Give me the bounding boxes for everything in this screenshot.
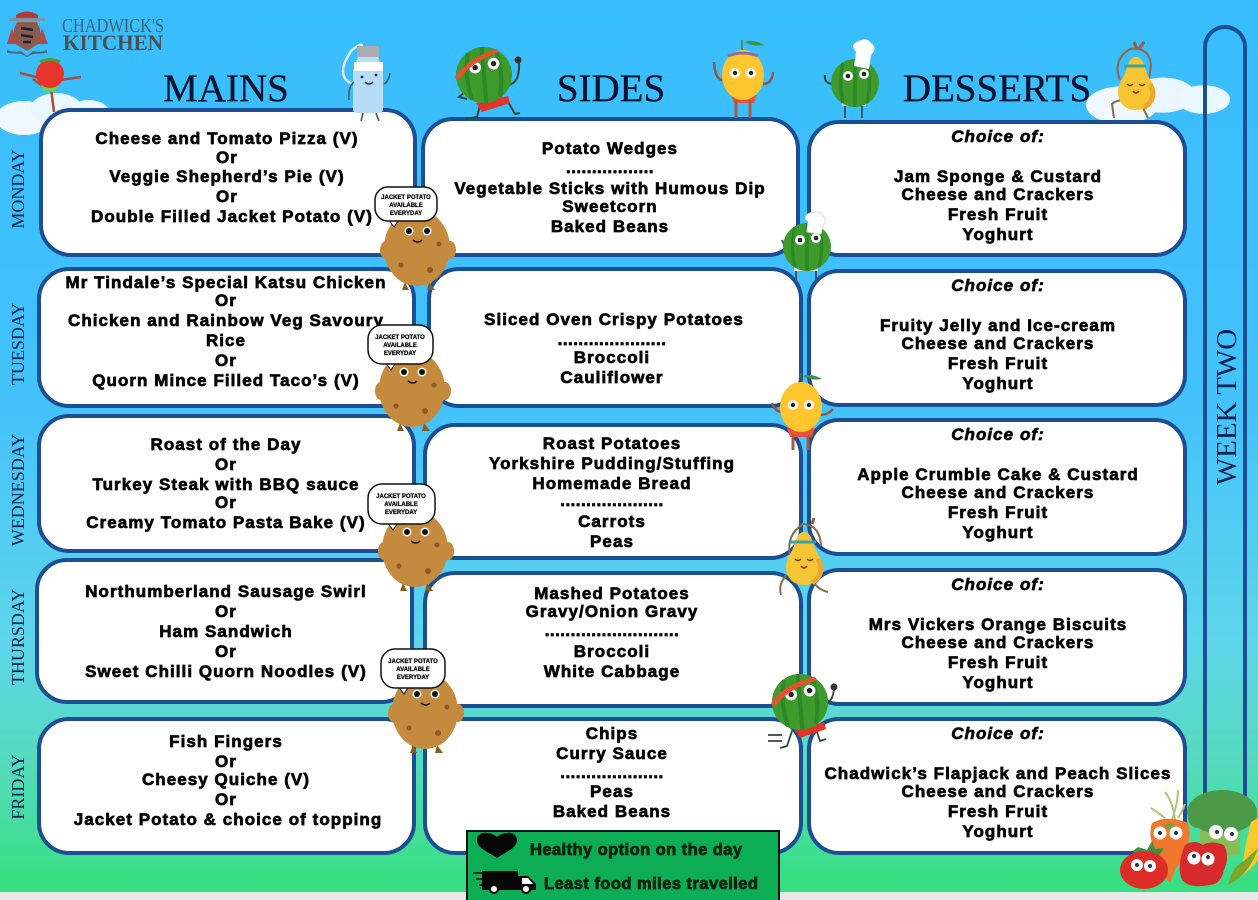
panel: mains friday: Or [215, 752, 237, 771]
week two panel [1205, 27, 1245, 810]
callout: jacket potato thursday: AVAILABLE [396, 667, 430, 673]
panel: desserts friday: Yoghurt [962, 822, 1034, 841]
callout: jacket potato wednesday [368, 484, 454, 591]
panel: desserts thursday: Choice of: [951, 575, 1045, 594]
panel: mains monday: Cheese and Tomato Pizza (V) [95, 129, 359, 148]
panel: mains tuesday: Or [215, 291, 237, 310]
panel: mains monday: Double Filled Jacket Potato (V) [91, 207, 373, 226]
panel: mains thursday: Or [215, 642, 237, 661]
panel: mains monday: Or [216, 148, 238, 167]
panel: sides thursday: White Cabbage [544, 662, 680, 681]
panel: desserts friday: Choice of: [951, 724, 1045, 743]
panel: desserts monday: Choice of: [951, 127, 1045, 146]
cloud left [0, 93, 110, 135]
icon: water bottle character [343, 45, 390, 121]
panel: desserts thursday: Mrs Vickers Orange Biscuits [869, 615, 1127, 634]
callout: jacket potato tuesday: EVERYDAY [384, 351, 416, 357]
panel: mains wednesday [39, 416, 414, 551]
week two label: WEEK TWO [1211, 329, 1243, 485]
day label friday: FRIDAY [8, 754, 28, 820]
panel: sides wednesday: Carrots [578, 512, 646, 531]
icon: heart [477, 833, 517, 858]
callout: jacket potato monday: EVERYDAY [390, 211, 422, 217]
callout: jacket potato monday: JACKET POTATO [381, 195, 431, 201]
icon: pear character top [1112, 42, 1154, 118]
panel: desserts tuesday: Yoghurt [962, 374, 1034, 393]
legend text healthy: Healthy option on the day [530, 841, 743, 859]
panel: mains tuesday: Mr Tindale’s Special Katsu Chicken [65, 273, 387, 292]
callout: jacket potato thursday [381, 649, 464, 753]
panel: desserts tuesday: Choice of: [951, 276, 1045, 295]
heading mains: MAINS [163, 67, 289, 110]
panel: desserts thursday: Yoghurt [962, 673, 1034, 692]
panel: mains tuesday [39, 269, 414, 406]
callout: jacket potato wednesday: JACKET POTATO [376, 494, 426, 500]
logo wordmark [62, 15, 164, 55]
panel: mains wednesday: Or [215, 455, 237, 474]
day label tuesday: TUESDAY [8, 303, 28, 385]
panel: mains tuesday: Chicken and Rainbow Veg Savoury [68, 311, 384, 330]
panel: sides monday: Vegetable Sticks with Humous Dip [454, 179, 766, 198]
panel: sides tuesday: Sliced Oven Crispy Potatoes [484, 310, 744, 329]
panel: sides friday: Curry Sauce [556, 744, 668, 763]
day label monday: MONDAY [8, 149, 28, 229]
callout: jacket potato tuesday [368, 325, 451, 431]
icon: chef watermelon on panel [782, 212, 831, 282]
panel: sides tuesday: Broccoli [574, 348, 650, 367]
icon: running watermelon bottom [768, 672, 838, 748]
panel: sides monday [423, 119, 798, 255]
panel: desserts thursday: Fresh Fruit [948, 653, 1048, 672]
panel: mains tuesday: Or [215, 351, 237, 370]
panel: desserts wednesday: Cheese and Crackers [902, 483, 1094, 502]
panel: desserts wednesday: Apple Crumble Cake & Custard [857, 465, 1139, 484]
panel: desserts tuesday: Fruity Jelly and Ice-cream [880, 316, 1116, 335]
panel: mains wednesday: Roast of the Day [151, 435, 301, 454]
icon: pear character middle [780, 518, 828, 595]
panel: sides friday: Chips [586, 724, 638, 743]
legend [467, 831, 779, 900]
panel: sides thursday: .......................... [545, 621, 679, 640]
panel: mains monday: Veggie Shepherd’s Pie (V) [109, 167, 345, 186]
panel: desserts monday: Fresh Fruit [948, 205, 1048, 224]
panel: sides thursday: Mashed Potatoes [534, 584, 690, 603]
panel: mains friday: Fish Fingers [169, 732, 283, 751]
panel: desserts friday [809, 719, 1185, 853]
callout: jacket potato thursday: EVERYDAY [397, 675, 429, 681]
panel: sides wednesday: Homemade Bread [532, 474, 692, 493]
panel: desserts monday: Cheese and Crackers [902, 185, 1094, 204]
panel: desserts wednesday: Yoghurt [962, 523, 1034, 542]
panel: desserts monday: Yoghurt [962, 225, 1034, 244]
icon: chef watermelon top [825, 39, 879, 118]
panel: mains monday [41, 110, 415, 255]
panel: sides friday [425, 719, 801, 853]
panel: mains thursday: Northumberland Sausage Swirl [85, 582, 367, 601]
panel: mains monday: Or [216, 187, 238, 206]
callout: jacket potato wednesday: EVERYDAY [385, 510, 417, 516]
panel: mains wednesday: Or [215, 493, 237, 512]
panel: sides thursday: Gravy/Onion Gravy [526, 602, 698, 621]
panel: desserts tuesday [809, 271, 1185, 405]
panel: mains friday [39, 719, 414, 853]
panel: desserts friday: Cheese and Crackers [902, 782, 1094, 801]
icon: tomato character [20, 60, 81, 112]
panel: mains thursday [37, 560, 412, 702]
panel: mains friday: Cheesy Quiche (V) [142, 770, 310, 789]
callout: jacket potato thursday: JACKET POTATO [388, 659, 438, 665]
heading sides: SIDES [557, 67, 665, 110]
logo [7, 12, 164, 57]
panel: sides wednesday: Yorkshire Pudding/Stuffing [489, 454, 735, 473]
panel: sides wednesday: .................... [560, 491, 664, 510]
panel: desserts friday: Fresh Fruit [948, 802, 1048, 821]
panel: sides thursday [425, 573, 801, 706]
panel: desserts tuesday: Cheese and Crackers [902, 334, 1094, 353]
panel: mains wednesday: Turkey Steak with BBQ sauce [92, 475, 360, 494]
panel: desserts monday: Jam Sponge & Custard [894, 167, 1102, 186]
panel: desserts wednesday: Choice of: [951, 425, 1045, 444]
panel: sides thursday: Broccoli [574, 642, 650, 661]
panel: desserts thursday [809, 570, 1185, 704]
panel: sides monday: Baked Beans [551, 217, 669, 236]
panel: desserts thursday: Cheese and Crackers [902, 633, 1094, 652]
day label thursday: THURSDAY [8, 589, 28, 685]
icon: vegetable group [1120, 790, 1258, 889]
panel: sides friday: Peas [590, 782, 634, 801]
panel: desserts friday: Chadwick’s Flapjack and Peach Slices [824, 764, 1172, 783]
panel: sides wednesday: Peas [590, 532, 634, 551]
panel: desserts wednesday [809, 420, 1185, 554]
panel: sides tuesday: Cauliflower [560, 368, 664, 387]
logo crest [7, 12, 48, 57]
panel: mains wednesday: Creamy Tomato Pasta Bake (V) [86, 513, 366, 532]
callout: jacket potato wednesday: AVAILABLE [384, 502, 418, 508]
logo wordmark: KITCHEN [63, 30, 163, 55]
panel: desserts monday [809, 122, 1185, 255]
panel: sides friday: Baked Beans [553, 802, 671, 821]
icon: lemon character middle [772, 373, 833, 450]
panel: sides monday: Potato Wedges [542, 139, 678, 158]
icon: delivery van [473, 871, 536, 893]
callout: jacket potato monday: AVAILABLE [389, 203, 423, 209]
panel: mains thursday: Or [215, 602, 237, 621]
callout: jacket potato tuesday: JACKET POTATO [375, 335, 425, 341]
panel: sides tuesday [429, 269, 801, 406]
panel: sides wednesday [425, 425, 801, 558]
callout: jacket potato monday [375, 187, 456, 290]
panel: sides monday: Sweetcorn [562, 197, 658, 216]
cloud right [1086, 78, 1230, 124]
panel: mains thursday: Sweet Chilli Quorn Noodles (V) [85, 662, 367, 681]
panel: desserts tuesday: Fresh Fruit [948, 354, 1048, 373]
day label wednesday: WEDNESDAY [8, 434, 28, 546]
legend text food miles: Least food miles travelled [544, 875, 758, 893]
panel: mains friday: Or [215, 790, 237, 809]
logo wordmark: CHADWICK'S [62, 15, 164, 37]
panel: sides friday: .................... [560, 763, 664, 782]
icon: lemon character top [714, 40, 773, 118]
callout: jacket potato tuesday: AVAILABLE [383, 343, 417, 349]
panel: mains tuesday: Rice [206, 331, 246, 350]
panel: sides wednesday: Roast Potatoes [543, 434, 681, 453]
panel: mains tuesday: Quorn Mince Filled Taco’s (V) [92, 371, 360, 390]
panel: mains thursday: Ham Sandwich [159, 622, 293, 641]
icon: running watermelon top [454, 45, 522, 119]
heading desserts: DESSERTS [903, 67, 1091, 110]
panel: sides monday: ................. [566, 158, 654, 177]
panel: sides tuesday: ..................... [558, 330, 666, 349]
panel: mains friday: Jacket Potato & choice of topping [74, 810, 382, 829]
panel: desserts wednesday: Fresh Fruit [948, 503, 1048, 522]
